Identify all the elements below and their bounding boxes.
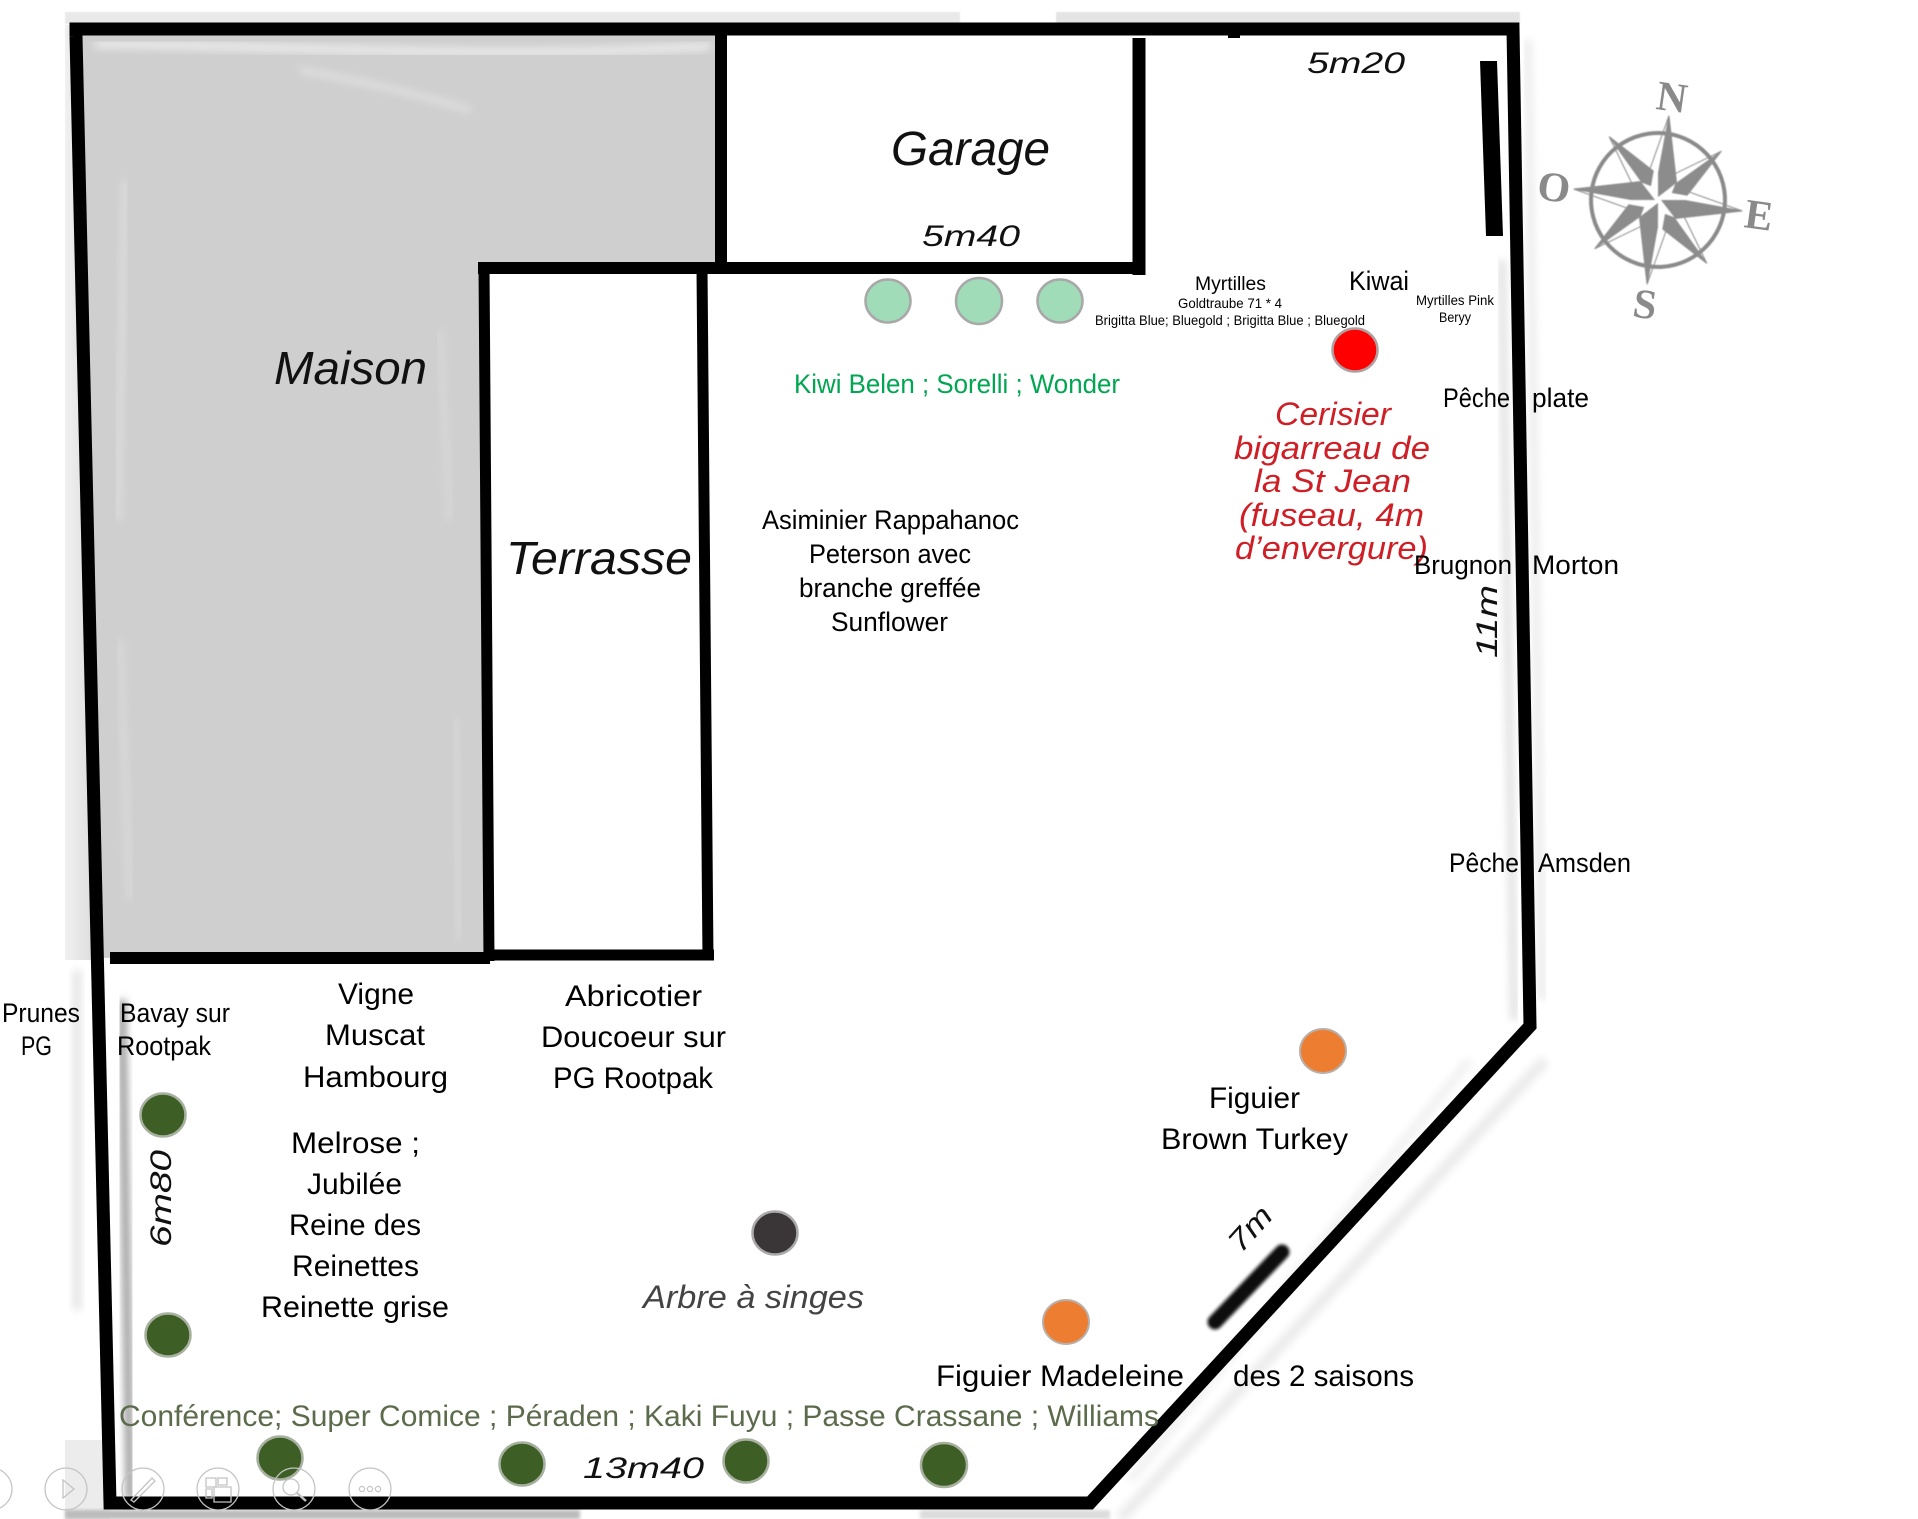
text block: Vigne Muscat Hambourg — [303, 978, 448, 1094]
dimension: 6m80: 6m80 — [145, 1150, 178, 1247]
cherry tree, red — [1332, 328, 1378, 372]
text block: Vigne Muscat Hambourg: Vigne — [338, 978, 414, 1011]
text block: apple varieties: Jubilée — [307, 1168, 402, 1201]
text block: Myrtilles Pink Beryy — [1416, 292, 1495, 325]
text block: Cerisier: (fuseau, 4m — [1239, 497, 1424, 533]
shadows around the scanned plan outline — [65, 12, 1545, 1519]
icon: slides — [197, 1468, 239, 1510]
icon: magnifier — [273, 1468, 315, 1510]
label: Maison: Maison — [274, 342, 427, 394]
icon: play — [45, 1468, 87, 1510]
text block: Figuier Brown Turkey: Brown Turkey — [1161, 1123, 1348, 1156]
text block: Asiminier: Asiminier Rappahanoc — [762, 505, 1019, 535]
text block: Asiminier: branche greffée — [799, 573, 981, 603]
panel: Maison grey area — [80, 34, 721, 958]
label: Bavay sur Rootpak: Rootpak — [117, 1031, 211, 1061]
text block: Abricotier — [541, 980, 726, 1095]
text block: Cerisier: Cerisier — [1275, 396, 1392, 432]
text block: Cerisier: bigarreau de — [1234, 430, 1430, 466]
label: Pêche plate: Pêche — [1443, 383, 1510, 413]
text block: Asiminier — [762, 505, 1019, 637]
icon: compass rose: N — [1654, 73, 1690, 123]
text block: Myrtilles — [1095, 274, 1365, 328]
text block: apple varieties — [261, 1127, 449, 1324]
bar: 5m20 dimension mark — [1480, 61, 1503, 236]
text block: Myrtilles: Brigitta Blue; Bluegold ; Brigitta Blue ; Bluegold — [1095, 312, 1365, 328]
text block: Myrtilles Pink Beryy: Myrtilles Pink — [1416, 292, 1495, 308]
text block: Myrtilles: Goldtraube 71 * 4 — [1178, 295, 1282, 311]
text block: Asiminier: Peterson avec — [809, 539, 971, 569]
label: Prunes PG: Prunes — [2, 998, 80, 1028]
label: Pêche Amsden: Amsden — [1538, 848, 1631, 878]
dimension: 7m: 7m — [1222, 1199, 1280, 1259]
icon: compass rose — [1534, 73, 1776, 330]
label: Kiwai: Kiwai — [1349, 266, 1409, 296]
label: Terrasse: Terrasse — [506, 532, 692, 584]
text block: Figuier Brown Turkey — [1161, 1082, 1348, 1156]
outer boundary — [76, 29, 1530, 1503]
icon: more — [349, 1468, 391, 1510]
label: Prunes PG: PG — [21, 1031, 52, 1061]
label: Figuier Madeleine des 2 saisons: des 2 saisons — [1233, 1360, 1414, 1393]
label: Figuier Madeleine des 2 saisons: Figuier Madeleine — [936, 1360, 1184, 1393]
text block: Cerisier: la St Jean — [1254, 463, 1411, 499]
icon: pen — [122, 1468, 164, 1510]
bar: 7m dimension mark — [1215, 1252, 1282, 1322]
icon: compass rose: E — [1742, 191, 1776, 241]
slide toolbar icons — [0, 1468, 391, 1510]
text block: Figuier Brown Turkey: Figuier — [1209, 1082, 1300, 1115]
label: Figuier Madeleine des 2 saisons — [936, 1360, 1414, 1393]
text block: Myrtilles: Myrtilles — [1195, 274, 1266, 295]
dimension: 11m: 11m — [1471, 585, 1504, 658]
label: Brugnon Morton: Morton — [1532, 550, 1619, 580]
label: Garage: Garage — [891, 123, 1050, 176]
text block: Vigne Muscat Hambourg: Muscat — [325, 1019, 426, 1052]
fruit trees, dark green — [140, 1094, 967, 1487]
icon: compass rose: S — [1630, 281, 1660, 330]
label: Pêche plate: plate — [1532, 383, 1589, 413]
text block: apple varieties: Melrose ; — [291, 1127, 420, 1160]
text block: Abricotier: Doucoeur sur — [541, 1021, 726, 1054]
text block: apple varieties: Reine des — [289, 1209, 421, 1242]
label: Pêche Amsden — [1449, 848, 1631, 878]
monkey puzzle tree, dark — [752, 1212, 798, 1254]
label: pear and kaki varieties: Conférence; Super Comice ; Péraden ; Kaki Fuyu ; Passe Crassane ; Williams — [119, 1400, 1159, 1433]
dimension: 5m20: 5m20 — [1307, 47, 1405, 80]
text block: Cerisier — [1234, 396, 1430, 566]
label: Arbre à singes: Arbre à singes — [641, 1279, 864, 1315]
dimension: 5m40: 5m40 — [922, 220, 1020, 253]
label: Brugnon Morton — [1414, 550, 1619, 580]
walls of the plan — [76, 29, 1530, 1503]
text block: Asiminier: Sunflower — [831, 607, 948, 637]
label: Bavay sur Rootpak: Bavay sur — [120, 998, 230, 1028]
label: Brugnon Morton: Brugnon — [1414, 550, 1512, 580]
label: kiwi varieties: Kiwi Belen ; Sorelli ; Wonder — [794, 369, 1120, 399]
text block: Abricotier: Abricotier — [565, 980, 702, 1013]
dimension: 13m40: 13m40 — [583, 1452, 704, 1485]
text block: Myrtilles Pink Beryy: Beryy — [1439, 309, 1471, 325]
text block: Vigne Muscat Hambourg: Hambourg — [303, 1061, 448, 1094]
text block: Abricotier: PG Rootpak — [553, 1062, 714, 1095]
label: Prunes PG — [2, 998, 80, 1061]
text block: apple varieties: Reinettes — [292, 1250, 419, 1283]
panel: white garage and terrasse — [483, 35, 1139, 955]
text block: Cerisier: d’envergure) — [1235, 530, 1428, 566]
icon: compass rose: O — [1534, 163, 1573, 213]
kiwi trees, light green — [866, 278, 1082, 324]
label: Bavay sur Rootpak — [117, 998, 230, 1061]
label: Pêche Amsden: Pêche — [1449, 848, 1519, 878]
text block: apple varieties: Reinette grise — [261, 1291, 449, 1324]
label: Pêche plate — [1443, 383, 1589, 413]
fig trees, orange — [1043, 1029, 1346, 1344]
